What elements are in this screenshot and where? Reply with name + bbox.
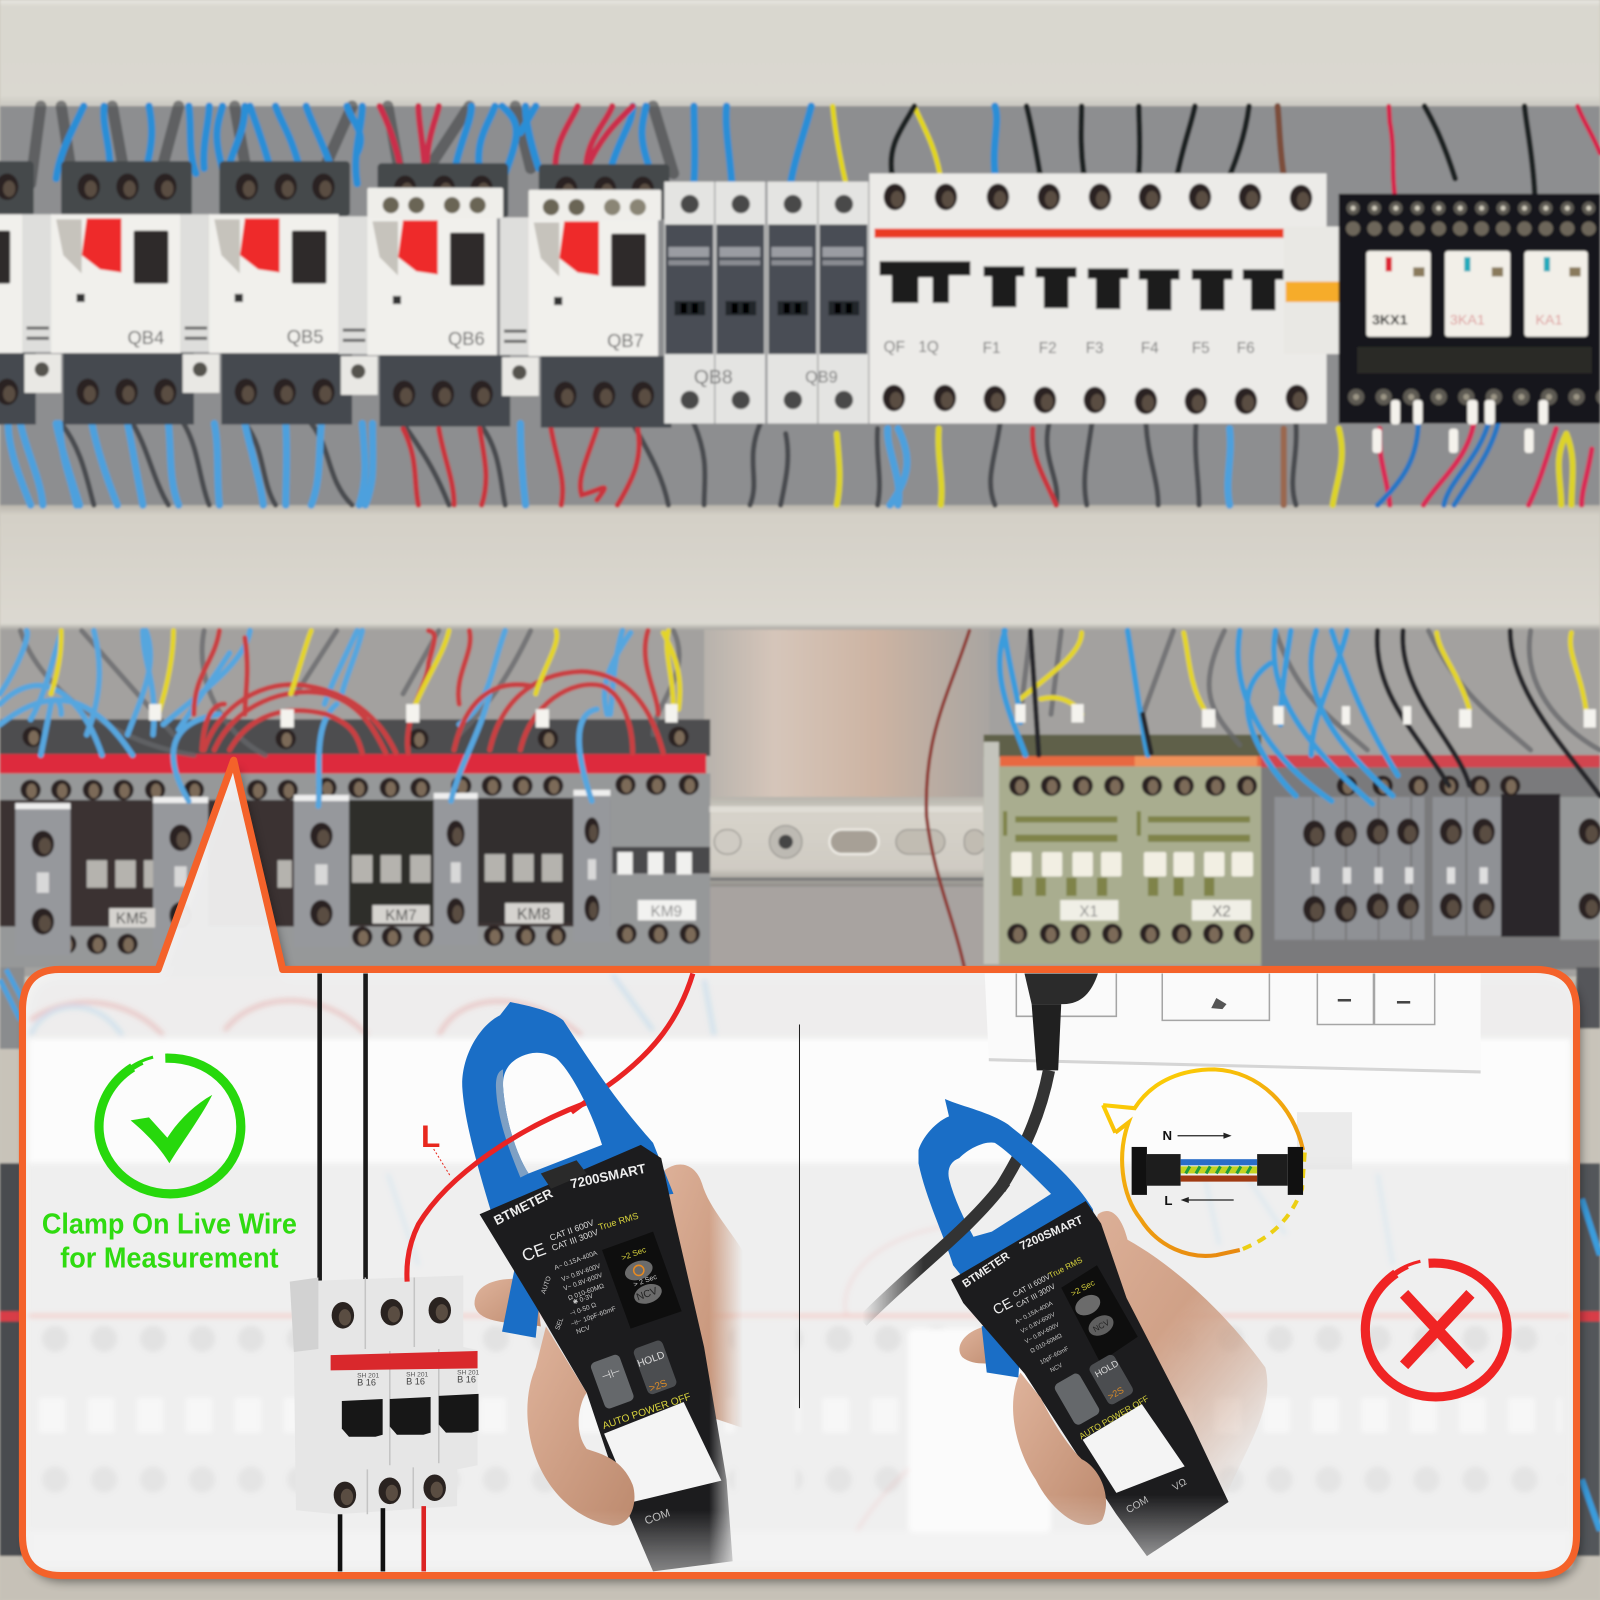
caption: clamp on live wire (42, 1209, 297, 1274)
meter lettering: COM (643, 1507, 672, 1527)
label KM5: KM5 (116, 910, 147, 927)
olive contactors X1 X2 (984, 735, 1265, 964)
label X1: X1 (1079, 903, 1098, 920)
circuit breaker, three pole (290, 1276, 480, 1514)
meter lettering: >2S (648, 1378, 669, 1395)
motor protection breakers row (0, 161, 671, 428)
circuit breaker, three pole: B 16 (357, 1378, 376, 1388)
meter lettering: CE (519, 1239, 548, 1266)
label X1 (1060, 900, 1118, 920)
circuit breaker, three pole: SH 201 (357, 1373, 380, 1380)
N arrow (1163, 1128, 1232, 1143)
black supply wires (317, 973, 368, 1282)
miniature circuit breaker bank: F6 (1237, 340, 1255, 357)
meter lettering: 10pF-60mF (1039, 1345, 1070, 1366)
miniature circuit breaker bank: F3 (1086, 340, 1104, 357)
control panel (1061, 1265, 1138, 1362)
meter lettering: Ω 010-60MΩ (1029, 1332, 1064, 1355)
meter lettering: V~ 0.8V-600V (563, 1272, 604, 1293)
miniature circuit breaker bank: QF (884, 339, 905, 356)
breaker Q84 (22, 161, 194, 424)
washed LCD screen (1083, 1404, 1185, 1493)
miniature circuit breaker bank: F4 (1141, 340, 1159, 357)
meter lettering: A~ 0.15A-400A (1014, 1300, 1055, 1326)
meter lettering: NCV (1049, 1362, 1065, 1374)
red live wire in front of clamp (407, 1103, 586, 1282)
fuse holders Q88 Q89: QB8 (694, 367, 733, 389)
meter lettering: ✱ 0-3V (572, 1292, 595, 1307)
breaker Q85: QB5 (287, 326, 323, 347)
meter lettering: >2 Sec (620, 1245, 647, 1262)
meter lettering: CAT III 300V (1014, 1281, 1057, 1310)
right scene: whole cable clamped (862, 973, 1267, 1556)
lower cabinet back plate (0, 630, 1600, 977)
wires below breaker (338, 1506, 426, 1571)
fuse holders Q88 Q89: QB9 (805, 369, 838, 387)
top cable trunking (0, 0, 1600, 106)
label KM7: KM7 (385, 907, 417, 924)
wall socket plate at top right of callout (985, 973, 1481, 1169)
meter lettering: 7200SMART (569, 1161, 647, 1191)
meter lettering (491, 1161, 692, 1527)
L label with dashed leader: L (421, 1118, 440, 1154)
dashed ring end (1243, 1148, 1305, 1249)
lower contactor row base (0, 719, 710, 967)
meter lettering: Ω 010-60MΩ (567, 1283, 605, 1302)
meter lettering: NCV (575, 1324, 591, 1336)
N L balanced current inset (1103, 1069, 1305, 1256)
left clamp meter in hand (462, 1002, 745, 1571)
red wire behind clamp (571, 973, 693, 1112)
callout panel shadow (27, 766, 1581, 1582)
meter lettering: True RMS (597, 1211, 640, 1232)
mottled wall patch (704, 630, 990, 803)
meter lettering: >2 Sec (1069, 1278, 1096, 1298)
side and bottom strips outside the callout (0, 967, 1600, 1600)
meter lettering: AUTO POWER OFF (601, 1392, 692, 1432)
miniature circuit breaker bank: 1Q (918, 339, 939, 356)
relay block (1339, 194, 1600, 453)
meter lettering: V= 0.8V-600V (1020, 1311, 1057, 1335)
breaker Q86 (339, 163, 510, 427)
meter lettering: NCV (1092, 1318, 1111, 1334)
cable plug (1024, 973, 1098, 1070)
L arrow: L (1164, 1193, 1172, 1208)
meter body (951, 1201, 1229, 1556)
L label with dashed leader (421, 1118, 450, 1176)
left scene: live wire through clamp (290, 973, 745, 1571)
upper wires entering the top of the devices (31, 106, 1600, 209)
contactor KM9 housing (610, 773, 710, 967)
L arrow (1164, 1193, 1234, 1208)
label KM5 (109, 908, 155, 928)
miniature circuit breaker bank: F2 (1039, 340, 1057, 357)
residual current module (1284, 227, 1340, 354)
fuse holders Q88 Q89 (664, 182, 868, 423)
meter body (480, 1145, 733, 1571)
miniature circuit breaker bank (869, 173, 1340, 423)
meter lettering: CAT II 600V (1011, 1272, 1052, 1299)
hand and forearm (1097, 1211, 1268, 1489)
grey auxiliary contact modules (1261, 755, 1600, 969)
black mains cable behind clamp (1000, 1070, 1049, 1189)
upper cabinet back plate (0, 106, 1600, 506)
relay 3KA1: 3KA1 (1450, 312, 1485, 328)
circuit breaker, three pole: SH 201 (406, 1372, 429, 1379)
meter lettering: >2S (1106, 1385, 1126, 1402)
meter lettering: CAT III 300V (550, 1227, 600, 1253)
meter lettering: AUTO POWER OFF (1077, 1393, 1150, 1441)
meter lettering: 7200SMART (1018, 1213, 1086, 1253)
meter lettering: V~ 0.8V-600V (1024, 1321, 1061, 1345)
breaker Q87 (500, 164, 671, 428)
label KM9 (638, 900, 696, 920)
circuit breaker, three pole: SH 201 (457, 1369, 480, 1376)
label KM8: KM8 (517, 905, 550, 923)
label KM9: KM9 (651, 903, 682, 920)
black cable passing through clamp (862, 1182, 1005, 1321)
relay 3KA1 (1445, 251, 1510, 337)
caption: clamp on live wire: for Measurement (60, 1242, 279, 1274)
right clamp meter in hand (917, 1099, 1267, 1556)
breaker Q83 (partial) (0, 161, 36, 424)
fingers behind meter (664, 1164, 740, 1427)
middle cable trunking (0, 505, 1600, 630)
meter lettering: A~ 0.15A-400A (554, 1250, 599, 1272)
meter lettering: True RMS (1047, 1255, 1085, 1280)
blue clamp jaws (917, 1099, 1097, 1286)
callout panel: orange speech bubble (22, 760, 1577, 1576)
relay 3KX1: 3KX1 (1372, 312, 1408, 328)
meter lettering: ⊣⊢ (600, 1366, 622, 1384)
meter lettering: V= 0.8V-600V (561, 1263, 602, 1283)
label X2: X2 (1212, 903, 1231, 920)
meter lettering: BTMETER (960, 1250, 1012, 1290)
relay 3KX1 (1366, 251, 1431, 337)
green tick icon (97, 1057, 241, 1194)
meter lettering: SEL (554, 1317, 565, 1331)
DIN rail (709, 797, 985, 968)
miniature circuit breaker bank: F5 (1192, 340, 1210, 357)
N arrow: N (1163, 1128, 1172, 1143)
breaker Q84: QB4 (128, 327, 164, 348)
meter lettering: CE (991, 1295, 1016, 1319)
breaker Q87: QB7 (607, 330, 644, 351)
meter lettering: VΩ (1171, 1477, 1189, 1494)
breaker Q86: QB6 (448, 328, 485, 349)
relay KA1: KA1 (1535, 312, 1563, 328)
meter lettering: CAT II 600V (548, 1217, 595, 1243)
meter lettering: ⊣ 0-50 Ω (569, 1302, 597, 1318)
lower fingers (1013, 1372, 1106, 1525)
meter lettering: > 2 Sec (632, 1273, 658, 1289)
circuit breaker, three pole: B 16 (406, 1377, 425, 1387)
label KM8 (505, 903, 563, 923)
washed background photo inside callout (29, 974, 1570, 1567)
meter lettering: NCV (635, 1286, 659, 1303)
orange outline (22, 760, 1577, 1576)
meter lettering: BTMETER (491, 1185, 556, 1228)
circuit breaker, three pole: B 16 (457, 1375, 476, 1385)
hand gripping meter (527, 1327, 634, 1526)
caption: clamp on live wire: Clamp On Live Wire (42, 1209, 297, 1241)
miniature circuit breaker bank: F1 (983, 340, 1001, 357)
label X2 (1192, 900, 1251, 920)
breaker Q85 (181, 161, 352, 424)
meter lettering: HOLD (636, 1350, 666, 1370)
meter lettering: COM (1124, 1495, 1151, 1516)
lower wires leaving the upper devices (8, 413, 1592, 505)
meter lettering: AUTO (540, 1275, 553, 1295)
meter lettering (960, 1213, 1189, 1516)
washed LCD screen (604, 1402, 721, 1502)
relay KA1 (1524, 251, 1588, 337)
divider line (799, 1024, 800, 1408)
lower row wires (0, 631, 1600, 967)
three-core cable cross-section (1132, 1147, 1303, 1195)
meter lettering: HOLD (1093, 1358, 1121, 1380)
meter lettering: ⊣⊢ 10pF-60mF (570, 1306, 617, 1328)
label KM7 (372, 905, 430, 924)
speech ring (1103, 1069, 1303, 1256)
red cross icon (1364, 1261, 1507, 1397)
blue clamp jaws (462, 1002, 673, 1214)
control panel (602, 1232, 682, 1329)
